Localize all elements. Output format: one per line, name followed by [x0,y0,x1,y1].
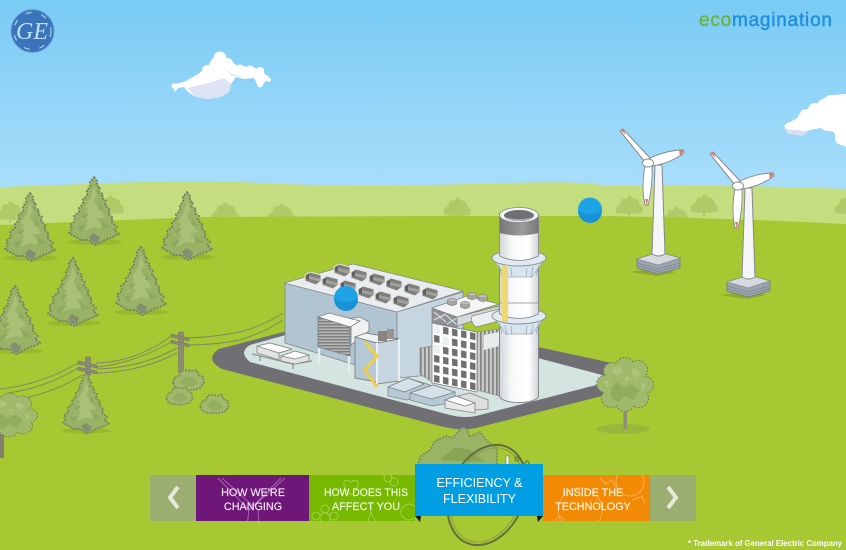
power plant [252,208,546,413]
roof deck with stacks [432,292,499,328]
GE logo: GE [16,19,48,45]
cloud: right edge [784,94,846,147]
utility pole left [78,357,97,375]
round tree right [596,358,653,434]
menu item: inside the technology: INSIDE THE [563,487,623,499]
navigation menu [150,464,696,522]
info hotspot: field [578,198,602,223]
info hotspot: plant [334,286,358,311]
utility pole right [171,332,189,372]
distant hill [0,182,846,240]
pine tree front [62,373,112,434]
foreground grass [0,216,846,550]
power lines [0,313,283,400]
next button [650,475,696,521]
shrubs [166,370,229,413]
concrete pad [244,331,606,417]
chimney tower [492,208,546,402]
slatted wall left [420,346,432,382]
louvered unit [318,313,369,373]
small outbuildings [388,378,488,413]
lower platform [492,315,546,334]
cloud: centre [172,52,271,99]
pine trees [0,177,215,354]
circular badge behind menu [433,433,541,550]
white equipment skids [252,343,312,369]
slatted wall right [477,329,499,396]
active menu tab: efficiency and flexibility: EFFICIENCY & [437,476,523,490]
stair tower [355,329,399,387]
GE logo [11,10,54,52]
large bush behind menu [417,427,497,470]
wind turbine 1 [620,129,684,276]
menu item: how we're changing: CHANGING [224,501,282,513]
wind turbine 2 [710,152,774,299]
rooftop cooling units [305,264,438,308]
menu item: how we're changing: HOW WE'RE [221,487,285,499]
trademark footnote: * Trademark of General Electric Company [688,539,843,548]
active menu tab: efficiency and flexibility: FLEXIBILITY [443,492,517,506]
upper platform [492,257,546,277]
menu item: how does this affect you: AFFECT YOU [332,501,400,513]
main hall [284,264,463,378]
menu item: how does this affect you: HOW DOES THIS [324,487,408,499]
asphalt road [212,332,618,429]
menu item: inside the technology [543,475,650,521]
menu item: how does this affect you [309,474,417,523]
distant tree silhouettes [0,194,846,228]
sky [0,0,846,230]
window block [432,323,477,392]
previous button [150,475,196,521]
active menu tab: efficiency and flexibility [415,464,543,522]
left round tree [0,394,37,458]
yellow ladder [502,265,508,322]
menu item: how we're changing [196,475,309,526]
menu item: inside the technology: TECHNOLOGY [555,501,631,513]
grey top band [500,215,538,236]
ecomagination wordmark: ecomagination [699,10,832,31]
